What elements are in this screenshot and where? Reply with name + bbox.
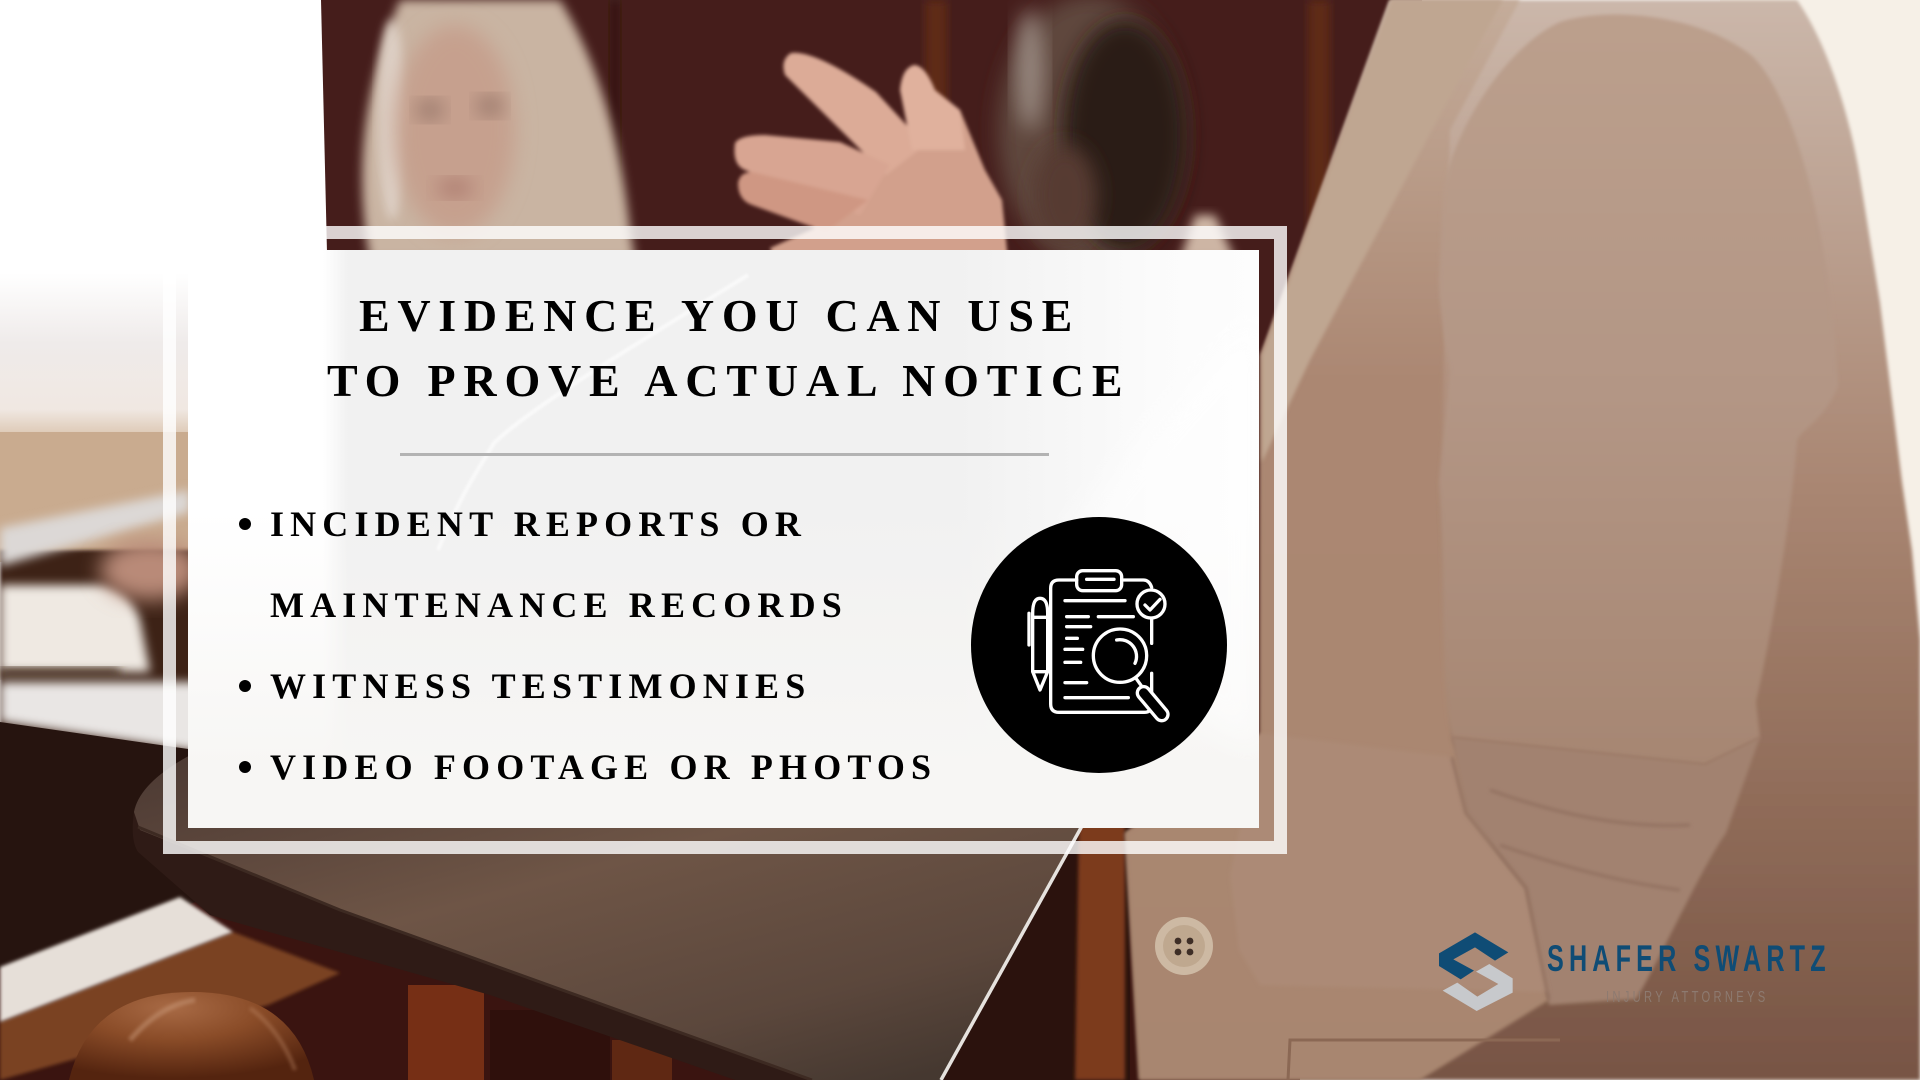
translucent outer frame xyxy=(163,226,1287,854)
title: EVIDENCE YOU CAN USE xyxy=(359,290,1080,341)
blazer front body xyxy=(1125,0,1549,1080)
logo: Shafer Swartz Injury Attorneys xyxy=(1439,932,1831,1011)
left desk and paper, blurred xyxy=(0,490,200,770)
icon: clipboard with magnifier in black circle xyxy=(971,517,1227,773)
podium xyxy=(133,750,1100,1080)
cream rail xyxy=(0,897,233,1022)
blurred man in background xyxy=(998,0,1235,265)
evidence list xyxy=(239,504,937,787)
beige blazer xyxy=(1125,0,1920,1080)
blurred woman with blonde hair xyxy=(362,0,635,260)
right window background xyxy=(1720,0,1920,1080)
scrunched sleeve xyxy=(1452,737,1760,1005)
jacket button xyxy=(1155,917,1213,975)
pocket xyxy=(1288,1040,1560,1080)
base dark wood behind everything xyxy=(0,780,1300,1080)
raised hand xyxy=(734,53,1012,300)
lapel xyxy=(1262,0,1503,462)
left window wall xyxy=(0,0,340,562)
divider xyxy=(400,453,1049,456)
upper arm sleeve xyxy=(1439,15,1838,764)
courtroom wood wall xyxy=(321,0,1422,800)
list item: video footage or photos: VIDEO FOOTAGE OR PHOTOS xyxy=(270,747,937,787)
list item: witness testimonies: WITNESS TESTIMONIES xyxy=(270,666,811,706)
logo tagline: INJURY ATTORNEYS xyxy=(1606,987,1768,1005)
list item: incident reports or maintenance records: INCIDENT REPORTS OR xyxy=(270,504,807,544)
list item: incident reports or maintenance records xyxy=(239,504,848,625)
logo mark xyxy=(1439,932,1513,1011)
dark floor area xyxy=(0,722,230,970)
forearm cuff xyxy=(1230,733,1549,992)
white content panel xyxy=(188,250,1259,828)
title: TO PROVE ACTUAL NOTICE xyxy=(327,355,1130,406)
logo wordmark: SHAFER SWARTZ xyxy=(1547,937,1831,979)
wood rail and lower panels xyxy=(0,820,1130,1080)
title xyxy=(327,290,1130,406)
turned wooden newel ball xyxy=(69,992,314,1080)
blazer back xyxy=(1125,0,1920,1080)
list item: incident reports or maintenance records: MAINTENANCE RECORDS xyxy=(270,585,848,625)
cuff shadow line xyxy=(1452,757,1690,1000)
